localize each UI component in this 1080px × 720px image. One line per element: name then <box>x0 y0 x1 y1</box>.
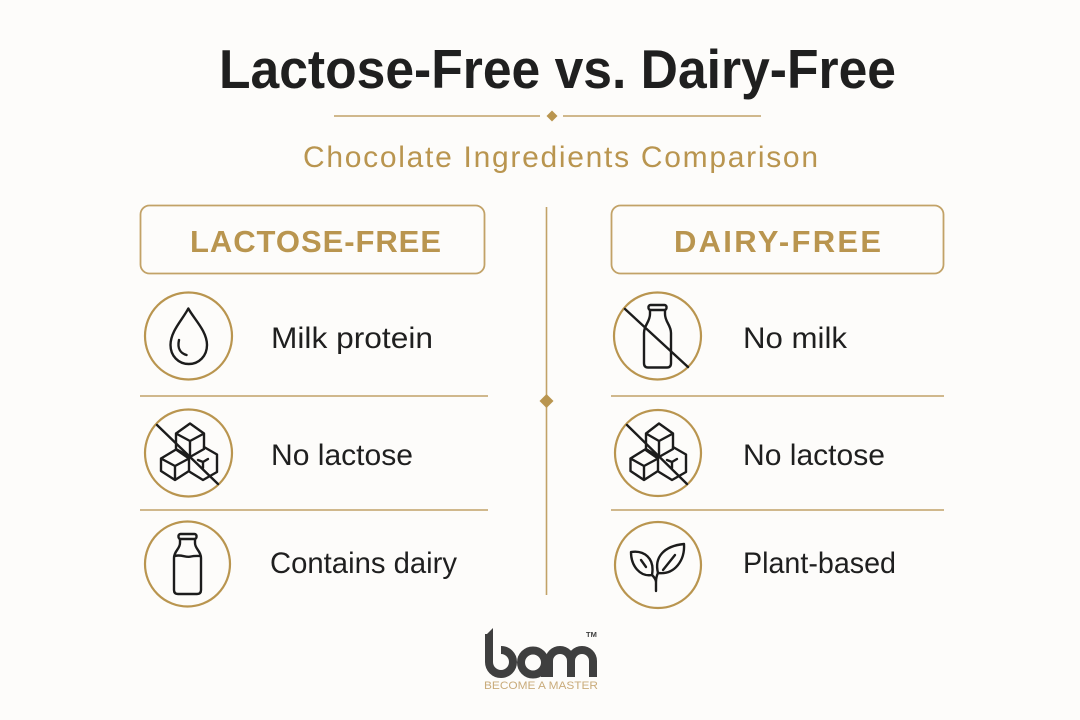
icon: crossed-out milk bottle <box>614 292 701 380</box>
label: plant-based: Plant-based <box>743 547 896 580</box>
label: no lactose: No lactose <box>743 439 885 472</box>
label: no lactose: No lactose <box>271 439 413 472</box>
icon: crossed-out lactose cubes <box>615 410 701 496</box>
heading: lactose-free: LACTOSE-FREE <box>190 224 441 259</box>
label: contains dairy: Contains dairy <box>270 547 457 580</box>
panel: lactose-free <box>140 206 488 606</box>
center vertical divider <box>540 207 554 595</box>
logo: bam become a master: BECOME A MASTER <box>484 680 598 692</box>
label: milk protein: Milk protein <box>271 322 433 355</box>
logo: bam become a master <box>484 628 598 692</box>
icon: plant sprout <box>615 522 701 608</box>
title divider with diamond <box>334 110 761 122</box>
icon: milk drop <box>145 292 232 380</box>
icon: milk bottle <box>145 522 230 606</box>
title: Lactose-Free vs. Dairy-Free <box>219 38 896 100</box>
heading: lactose-free <box>140 206 484 274</box>
subtitle: Chocolate Ingredients Comparison <box>303 141 818 174</box>
logo: bam become a master: TM <box>586 630 597 639</box>
heading: dairy-free <box>612 206 944 274</box>
panel: dairy-free <box>611 206 944 608</box>
label: no milk: No milk <box>743 322 848 355</box>
heading: dairy-free: DAIRY-FREE <box>674 224 881 259</box>
icon: crossed-out lactose cubes <box>145 410 232 496</box>
